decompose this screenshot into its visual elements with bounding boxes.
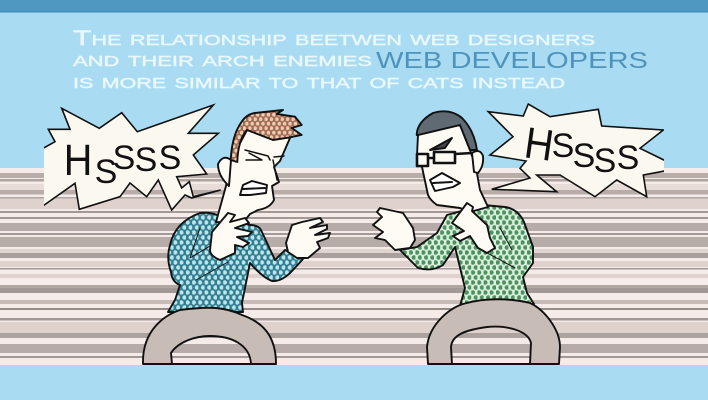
left hair (231, 110, 302, 162)
left hand raised (286, 218, 330, 258)
left character: web designer (143, 110, 330, 364)
left head (216, 130, 290, 224)
speech bubble left (40, 105, 221, 210)
bubble text right: SSSS (552, 127, 639, 180)
right head (417, 125, 488, 212)
right sweater fold lines (478, 228, 515, 268)
right glasses (417, 152, 472, 166)
right hair (417, 111, 477, 150)
left hand front (210, 213, 252, 260)
heading (73, 27, 648, 93)
heading: The relationship beetwen web designers (73, 27, 595, 50)
bubble letter H left: H (64, 135, 92, 184)
heading: WEB DEVELOPERS (376, 47, 648, 73)
bubble text left: SSSS (95, 139, 181, 191)
right chair (427, 299, 560, 364)
striped floor band (0, 168, 708, 365)
right hand front (452, 203, 495, 253)
right ear (472, 151, 483, 173)
left mouth (240, 181, 267, 195)
right hand left (373, 208, 415, 250)
right sweater (400, 205, 534, 306)
heading: is more similar to that of cats instead (73, 70, 565, 93)
left chair (143, 308, 276, 364)
left angry brow and eye (245, 150, 284, 180)
left sweater (168, 213, 303, 312)
bubble letter H right: H (522, 117, 557, 170)
bottom band (0, 365, 708, 400)
left ear (218, 158, 231, 186)
right brow (430, 138, 452, 150)
right character: web developer (373, 111, 560, 364)
top band (0, 0, 708, 12)
left sweater fold lines (190, 228, 228, 280)
right mouth (430, 173, 460, 191)
heading: and their arch enemies (73, 48, 372, 71)
speech bubble right (488, 104, 670, 197)
